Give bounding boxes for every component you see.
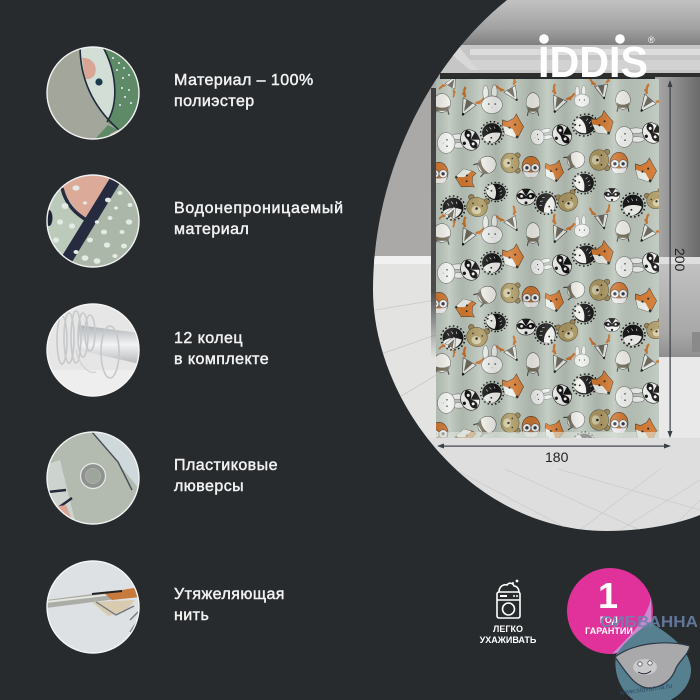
curtain rail xyxy=(440,73,700,77)
text: waterproof xyxy=(174,200,344,238)
text: rings xyxy=(174,330,269,368)
text: material xyxy=(174,72,314,110)
icon: water drops on fabric xyxy=(46,174,140,268)
dimension: width arrow xyxy=(437,444,671,462)
curtain shadow strip xyxy=(431,88,436,358)
icon: rod with rings xyxy=(46,303,140,397)
feature: material xyxy=(46,46,314,140)
icon: washing machine xyxy=(496,580,521,619)
text: warranty label xyxy=(585,615,633,636)
feature: weighted thread xyxy=(46,560,285,654)
text: material: Материал – 100% xyxy=(174,72,314,89)
feature: rings xyxy=(46,303,269,397)
text: weighted thread: Утяжеляющая xyxy=(174,586,285,603)
text: waterproof: материал xyxy=(174,220,249,238)
text: waterproof: Водонепроницаемый xyxy=(174,200,344,217)
text: warranty label: ГАРАНТИИ xyxy=(585,626,633,636)
wall left xyxy=(370,75,440,260)
text: warranty label: ГОД xyxy=(600,615,618,625)
wainscot tiles xyxy=(370,256,700,442)
icon: grommet xyxy=(46,431,140,525)
text: rings: в комплекте xyxy=(174,350,269,368)
dimension: width arrow: 180 xyxy=(545,449,569,465)
badge: easy care xyxy=(480,580,536,645)
text: grommets: люверсы xyxy=(174,478,244,494)
cornice moulding xyxy=(439,45,700,75)
watermark: Sibvanna mascot: www.sibvanna.ru xyxy=(618,683,673,697)
logo: IDDIS: ® xyxy=(648,35,655,45)
text: rings: 12 колец xyxy=(174,330,243,347)
text: grommets xyxy=(174,457,278,495)
text: easy care xyxy=(480,624,536,645)
curtain fabric with animal print xyxy=(436,79,659,438)
watermark: Sibvanna mascot: СИБВАННА xyxy=(600,614,698,631)
photo panel: bathroom with curtain xyxy=(373,0,700,531)
feature: waterproof xyxy=(46,174,344,268)
text: easy care: ЛЕГКО xyxy=(493,624,523,634)
floor xyxy=(427,438,700,531)
text: grommets: Пластиковые xyxy=(174,457,278,474)
dimension: height arrow: 200 xyxy=(672,248,688,272)
text: weighted thread xyxy=(174,586,285,624)
dimension: height arrow xyxy=(668,80,684,438)
icon: weighted hem xyxy=(46,560,140,654)
logo: IDDIS: IDDIS xyxy=(538,38,648,87)
badge: 1 year warranty xyxy=(567,568,653,654)
ceiling xyxy=(460,0,700,47)
text: warranty number: 1 xyxy=(598,575,618,616)
text: material: полиэстер xyxy=(174,92,255,110)
text: weighted thread: нить xyxy=(174,606,209,624)
wall right xyxy=(655,75,700,260)
icon: fabric close-up xyxy=(46,46,140,140)
feature: grommets xyxy=(46,431,278,525)
text: easy care: УХАЖИВАТЬ xyxy=(480,635,536,645)
